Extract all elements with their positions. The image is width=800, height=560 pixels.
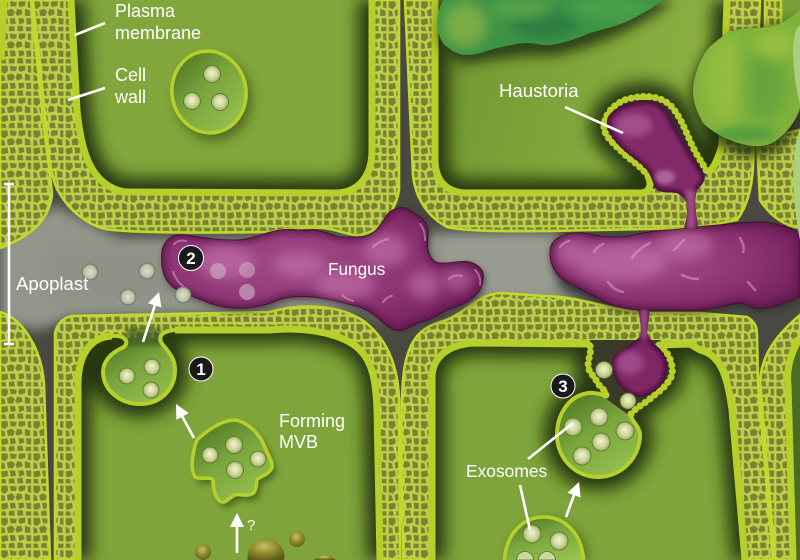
- badge 2: [178, 246, 204, 270]
- left fungus body: [162, 208, 483, 330]
- label: Forming MVB: [279, 411, 345, 452]
- vesicle: fusing MVB exosomes: [119, 359, 160, 398]
- wall: top-left cell: [33, 0, 399, 235]
- bottom-right cell cytoplasm: [788, 338, 800, 560]
- label: Plasma membrane: membrane: [115, 23, 201, 43]
- leaf shadow: [438, 0, 800, 157]
- vesicle: top-left cell MVB: [165, 45, 253, 140]
- fungal spore top: [437, 0, 663, 55]
- label: Cell wall: wall: [114, 87, 146, 107]
- apoplast exosomes: [82, 262, 255, 305]
- badge 1: 1: [196, 360, 206, 379]
- label: Fungus: Fungus: [328, 259, 385, 279]
- wall: right cell below leaf: [757, 130, 800, 228]
- upper haustorium: [607, 101, 705, 230]
- label: Cell wall: [68, 65, 146, 107]
- bottom-left cell cytoplasm: [78, 329, 380, 560]
- scalloped membrane around haustoria: [588, 96, 707, 414]
- right fungus body: [550, 222, 800, 310]
- label: Haustoria: [499, 80, 623, 133]
- vesicle: forming MVB: [192, 420, 276, 507]
- label: Plasma membrane: Plasma: [115, 1, 176, 21]
- top-left cell cytoplasm: [71, 0, 372, 193]
- badge 1: [189, 357, 213, 381]
- label: Exosomes: [466, 423, 573, 530]
- top-centre cell cytoplasm: [435, 0, 727, 193]
- label: Apoplast with bracket: [4, 184, 89, 344]
- label: Exosomes: Exosomes: [466, 461, 547, 481]
- vesicle: budding MVB exosomes near haustorium: [564, 362, 636, 465]
- wall: far-left top cell: [0, 0, 52, 248]
- lower haustorium: [612, 309, 667, 397]
- badge 2: 2: [186, 249, 196, 268]
- vesicle: bottom MVB: [504, 517, 588, 560]
- wall: bottom-centre cell: [401, 293, 773, 560]
- arrow: MVB fusion to apoplast: [143, 292, 161, 342]
- arrow: droplets to forming MVB with question mark: [230, 513, 255, 553]
- label: Forming MVB: Forming: [279, 411, 345, 431]
- dark shadow under fungus: [164, 211, 800, 333]
- wall: bottom-right cell: [760, 315, 800, 560]
- label: Plasma membrane: [75, 1, 201, 43]
- arrow: bottom MVB to fusing MVB: [566, 482, 581, 517]
- upper right cell interior: [781, 0, 800, 40]
- label: Haustoria: Haustoria: [499, 80, 579, 101]
- lumens and haustorial cavities: [101, 100, 708, 477]
- arrow: forming MVB to fusing MVB: [176, 404, 194, 438]
- wall: bottom-left cell: [55, 306, 400, 560]
- wall: top-centre cell: [405, 0, 760, 231]
- arrow: droplets to forming MVB with question mark: ?: [247, 517, 255, 534]
- bottom-centre cell cytoplasm: [432, 343, 745, 560]
- fungal spores far right: [793, 25, 800, 240]
- label: Apoplast with bracket: Apoplast: [16, 273, 89, 294]
- wall: far-left bottom cell: [0, 312, 50, 560]
- olive droplets: [195, 531, 336, 560]
- label: Cell wall: Cell: [115, 65, 146, 85]
- badge 3: [551, 374, 575, 398]
- fungal spore right: [693, 10, 800, 146]
- badge 3: 3: [558, 377, 568, 396]
- wall: top-right strip: [765, 0, 781, 40]
- apoplast space: [0, 205, 600, 330]
- label: Forming MVB: MVB: [279, 432, 318, 452]
